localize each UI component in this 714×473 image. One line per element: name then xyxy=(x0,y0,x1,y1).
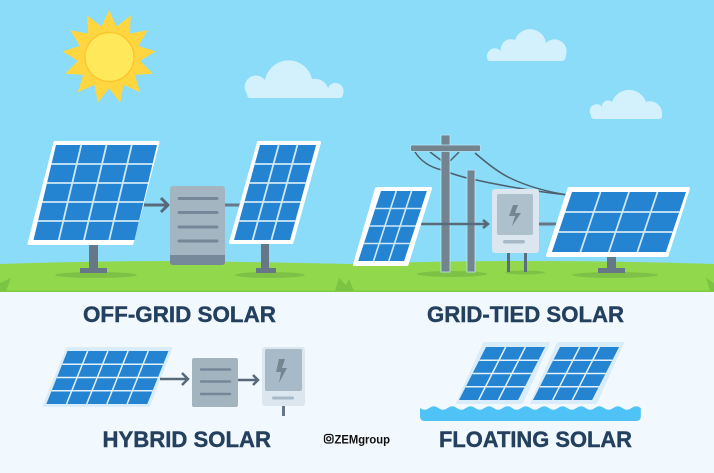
heading: floating: FLOATING SOLAR xyxy=(439,427,632,452)
grid-tied solar panel left xyxy=(354,188,430,264)
off-grid system xyxy=(29,142,320,273)
heading: hybrid: HYBRID SOLAR xyxy=(102,427,271,452)
arrow to inverter xyxy=(238,375,258,385)
off-grid solar panel right xyxy=(230,142,320,242)
hybrid inverter xyxy=(262,347,305,416)
hybrid solar panel xyxy=(44,348,172,406)
grid-tied solar panel right xyxy=(548,188,688,256)
grid-tied panel stand xyxy=(598,255,625,273)
credit: ZEMgroup xyxy=(334,434,390,446)
heading: grid-tied: GRID-TIED SOLAR xyxy=(427,302,624,327)
floating solar panel right xyxy=(531,343,623,403)
arrow to battery xyxy=(160,373,188,385)
icon: instagram xyxy=(324,434,333,443)
connector to right panel xyxy=(225,204,240,206)
ground shadows xyxy=(55,270,658,278)
heading: off-grid: OFF-GRID SOLAR xyxy=(83,302,276,327)
connector to right panel xyxy=(539,222,557,226)
lower background xyxy=(0,292,714,473)
inverter meter xyxy=(492,189,539,272)
arrow to meter xyxy=(421,220,488,228)
cloud 2 xyxy=(487,29,567,61)
battery cabinet xyxy=(170,186,225,265)
cloud 1 xyxy=(245,60,344,98)
ground xyxy=(0,261,714,292)
sun xyxy=(61,10,157,105)
hybrid battery box xyxy=(192,358,238,407)
cloud 3 xyxy=(590,90,662,119)
sky background xyxy=(0,0,714,292)
arrow to battery xyxy=(144,198,168,212)
grid-tied system xyxy=(354,135,688,273)
off-grid panel stand right xyxy=(256,243,276,273)
floating solar panel left xyxy=(457,343,549,403)
off-grid solar panel left xyxy=(29,142,158,244)
hybrid system xyxy=(44,347,305,416)
wires xyxy=(415,152,568,195)
water xyxy=(420,406,641,421)
floating system xyxy=(420,343,641,421)
off-grid panel stand left xyxy=(80,243,107,273)
utility pole xyxy=(410,135,480,272)
